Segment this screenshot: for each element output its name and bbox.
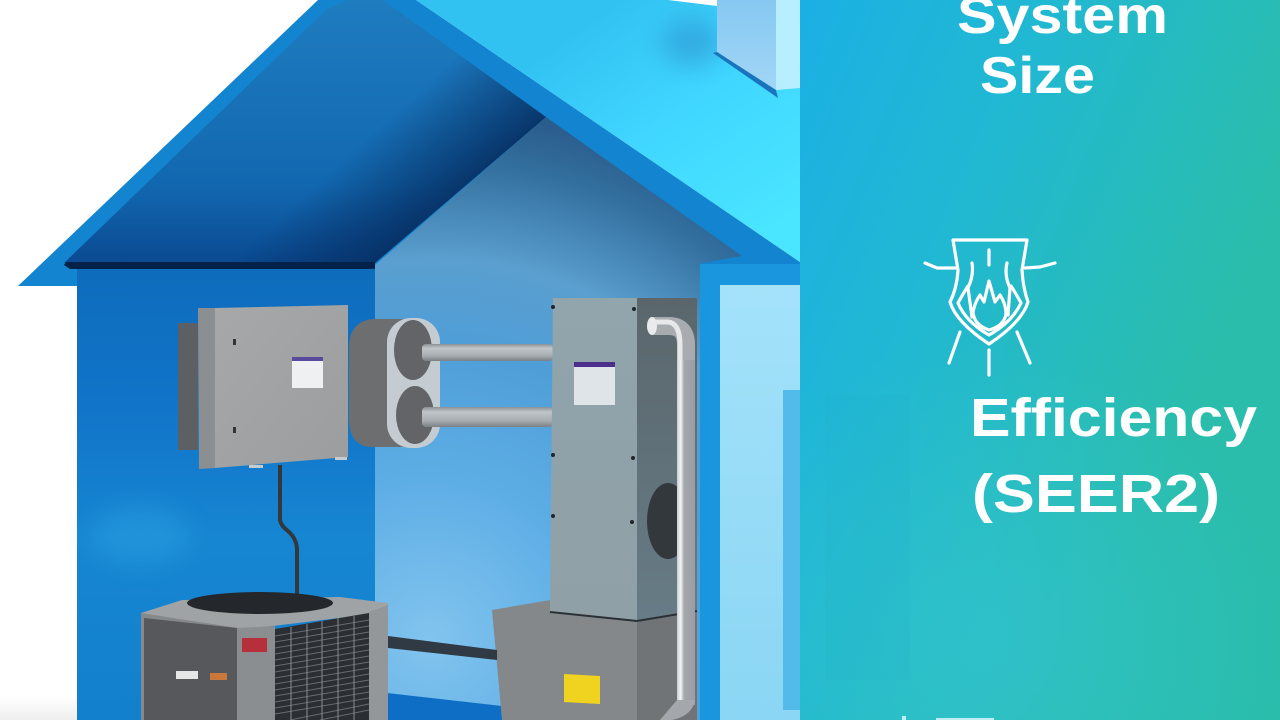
chimney — [713, 0, 800, 98]
spec label — [574, 362, 615, 405]
house illustration — [18, 0, 800, 720]
right wall interior — [720, 285, 800, 720]
right wall edge — [700, 264, 800, 720]
screws — [551, 305, 636, 524]
red badge — [242, 638, 267, 652]
chimney shadow on roof — [662, 18, 722, 66]
eave dark band — [64, 262, 375, 269]
heading: system size: Size — [980, 47, 1095, 105]
right teal panel — [800, 0, 1280, 720]
cut-off icon at bottom edge — [902, 716, 994, 720]
left side panel — [141, 613, 238, 720]
floor — [387, 693, 502, 720]
duct collar — [349, 318, 440, 448]
yellow label — [564, 674, 600, 704]
left wall — [77, 269, 375, 720]
side face — [637, 298, 697, 620]
right post — [369, 605, 388, 720]
air handler — [550, 298, 697, 620]
top — [141, 597, 388, 630]
furnace base — [492, 600, 697, 720]
wall light patch — [90, 505, 190, 565]
roof: right top slab — [416, 0, 800, 262]
ground shadow — [0, 695, 80, 720]
back wall — [375, 117, 742, 720]
heading: system size — [957, 0, 1168, 105]
heading: efficiency (SEER2) — [970, 388, 1257, 524]
label on control box — [292, 357, 323, 388]
grille — [275, 613, 369, 720]
blower opening — [647, 483, 689, 559]
heading: efficiency (SEER2): Efficiency — [970, 388, 1257, 448]
front face — [550, 298, 637, 620]
fan disc — [187, 592, 333, 614]
outdoor condenser unit — [141, 592, 388, 720]
condensate drain pipe — [388, 636, 497, 660]
power conduit — [280, 465, 297, 595]
icon: flame in heat exchanger — [925, 240, 1055, 375]
vertical copper line — [647, 317, 695, 720]
refrigerant pipes — [422, 344, 553, 427]
roof: outer band and fascia — [18, 0, 800, 286]
brand tags — [176, 671, 198, 679]
heading: efficiency (SEER2): (SEER2) — [972, 464, 1220, 524]
white sky gap behind chimney — [668, 0, 717, 6]
corner post — [237, 626, 275, 720]
wall-mounted control box — [178, 305, 348, 469]
roof: underside gable — [64, 0, 546, 263]
